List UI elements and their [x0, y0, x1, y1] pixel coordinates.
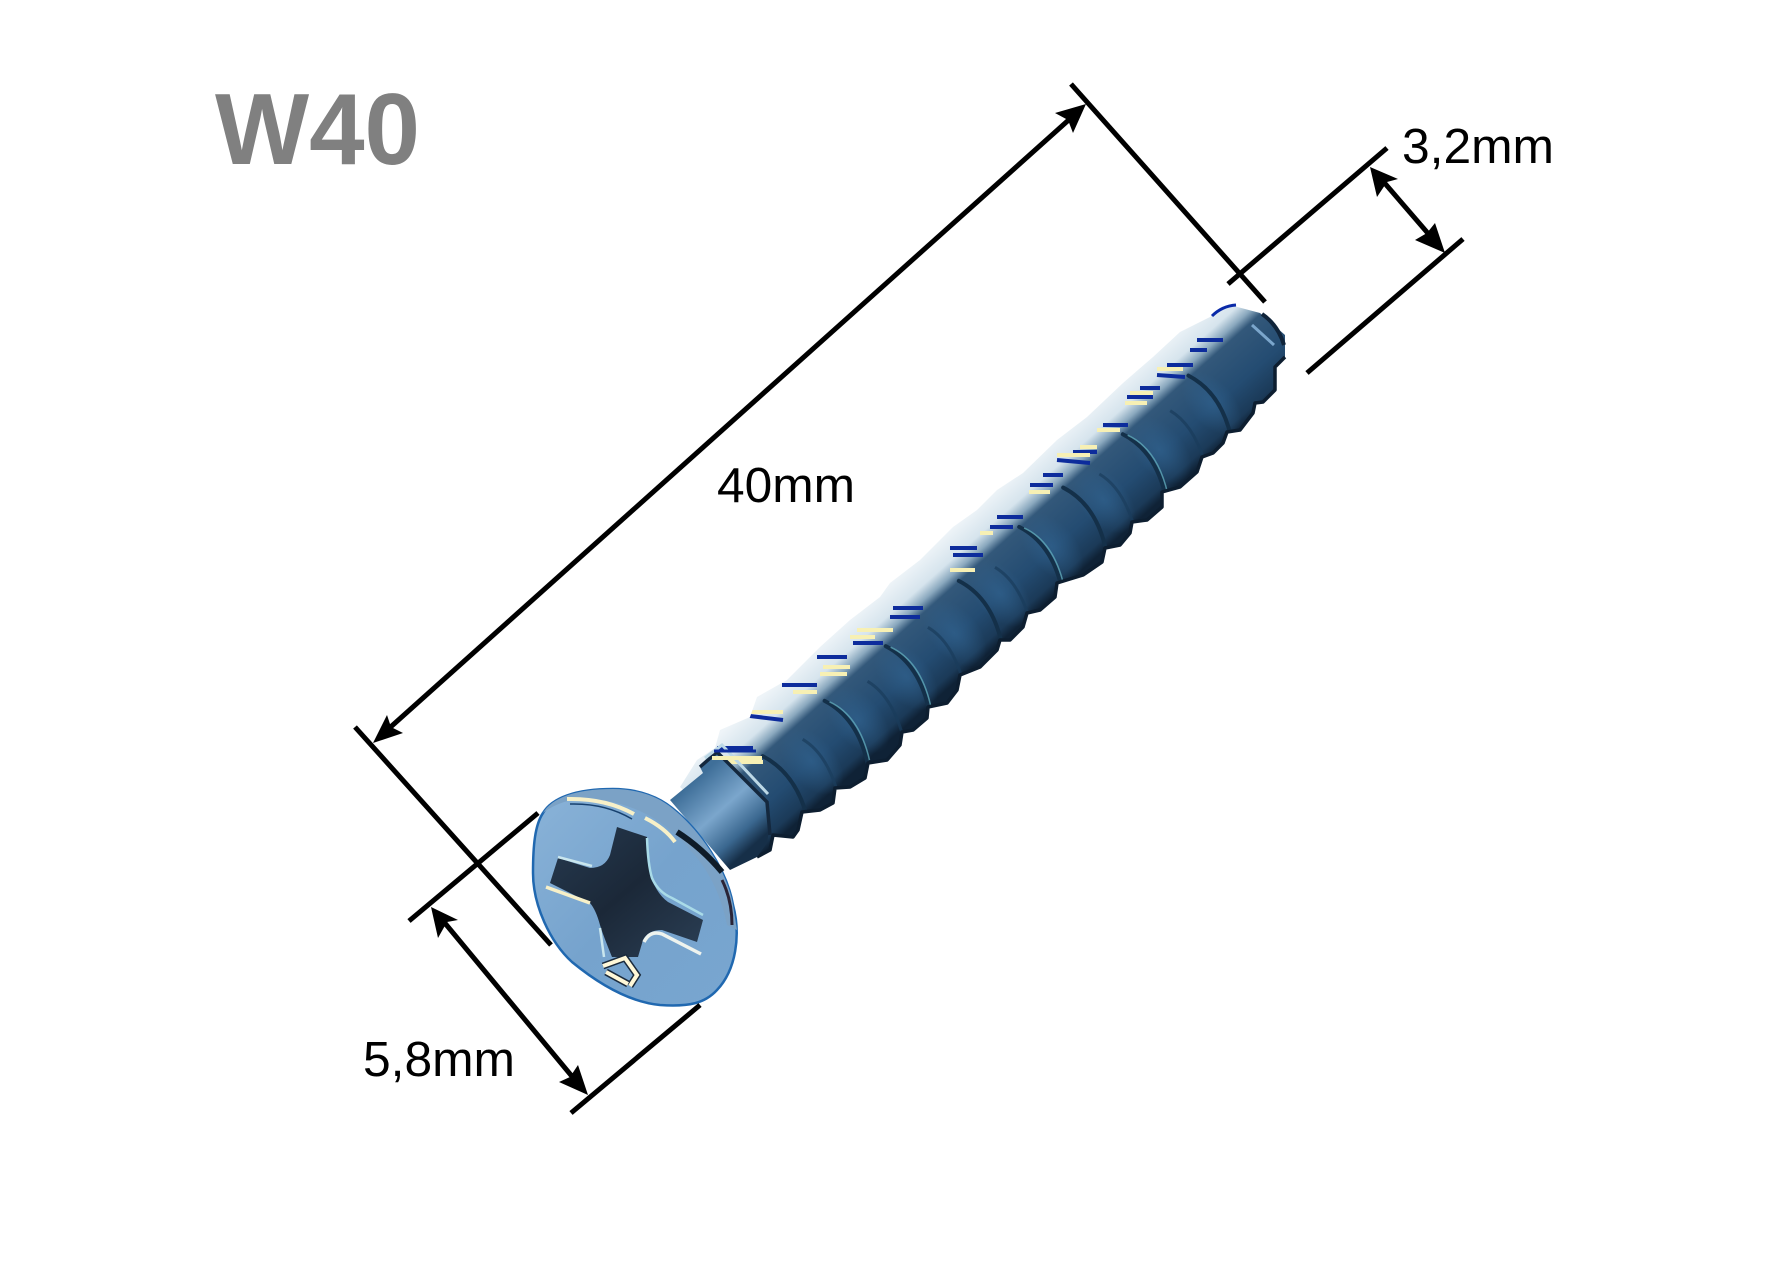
label: 5,8mm: 5,8mm — [363, 1033, 515, 1087]
infographic: screw dimension drawing — [215, 82, 1551, 1115]
phillips cross recess — [550, 827, 703, 957]
recess burr highlight — [603, 958, 637, 986]
label: 40mm: 40mm — [717, 459, 855, 513]
dimension: length 40mm — [355, 84, 1265, 945]
head rim — [543, 789, 737, 930]
thread highlight stripes — [713, 340, 1223, 762]
screw head — [533, 789, 737, 1005]
screw thread — [680, 305, 1285, 857]
screw neck — [670, 745, 770, 870]
title: W40: W40 — [215, 74, 420, 186]
thread lower edge — [757, 357, 1285, 857]
screw illustration — [533, 305, 1285, 1005]
dimension: head diameter 5,8mm — [363, 813, 700, 1113]
dimension: thread diameter 3,2mm — [1228, 120, 1554, 373]
label: 3,2mm: 3,2mm — [1402, 120, 1554, 174]
screw tip detail — [1212, 305, 1284, 345]
